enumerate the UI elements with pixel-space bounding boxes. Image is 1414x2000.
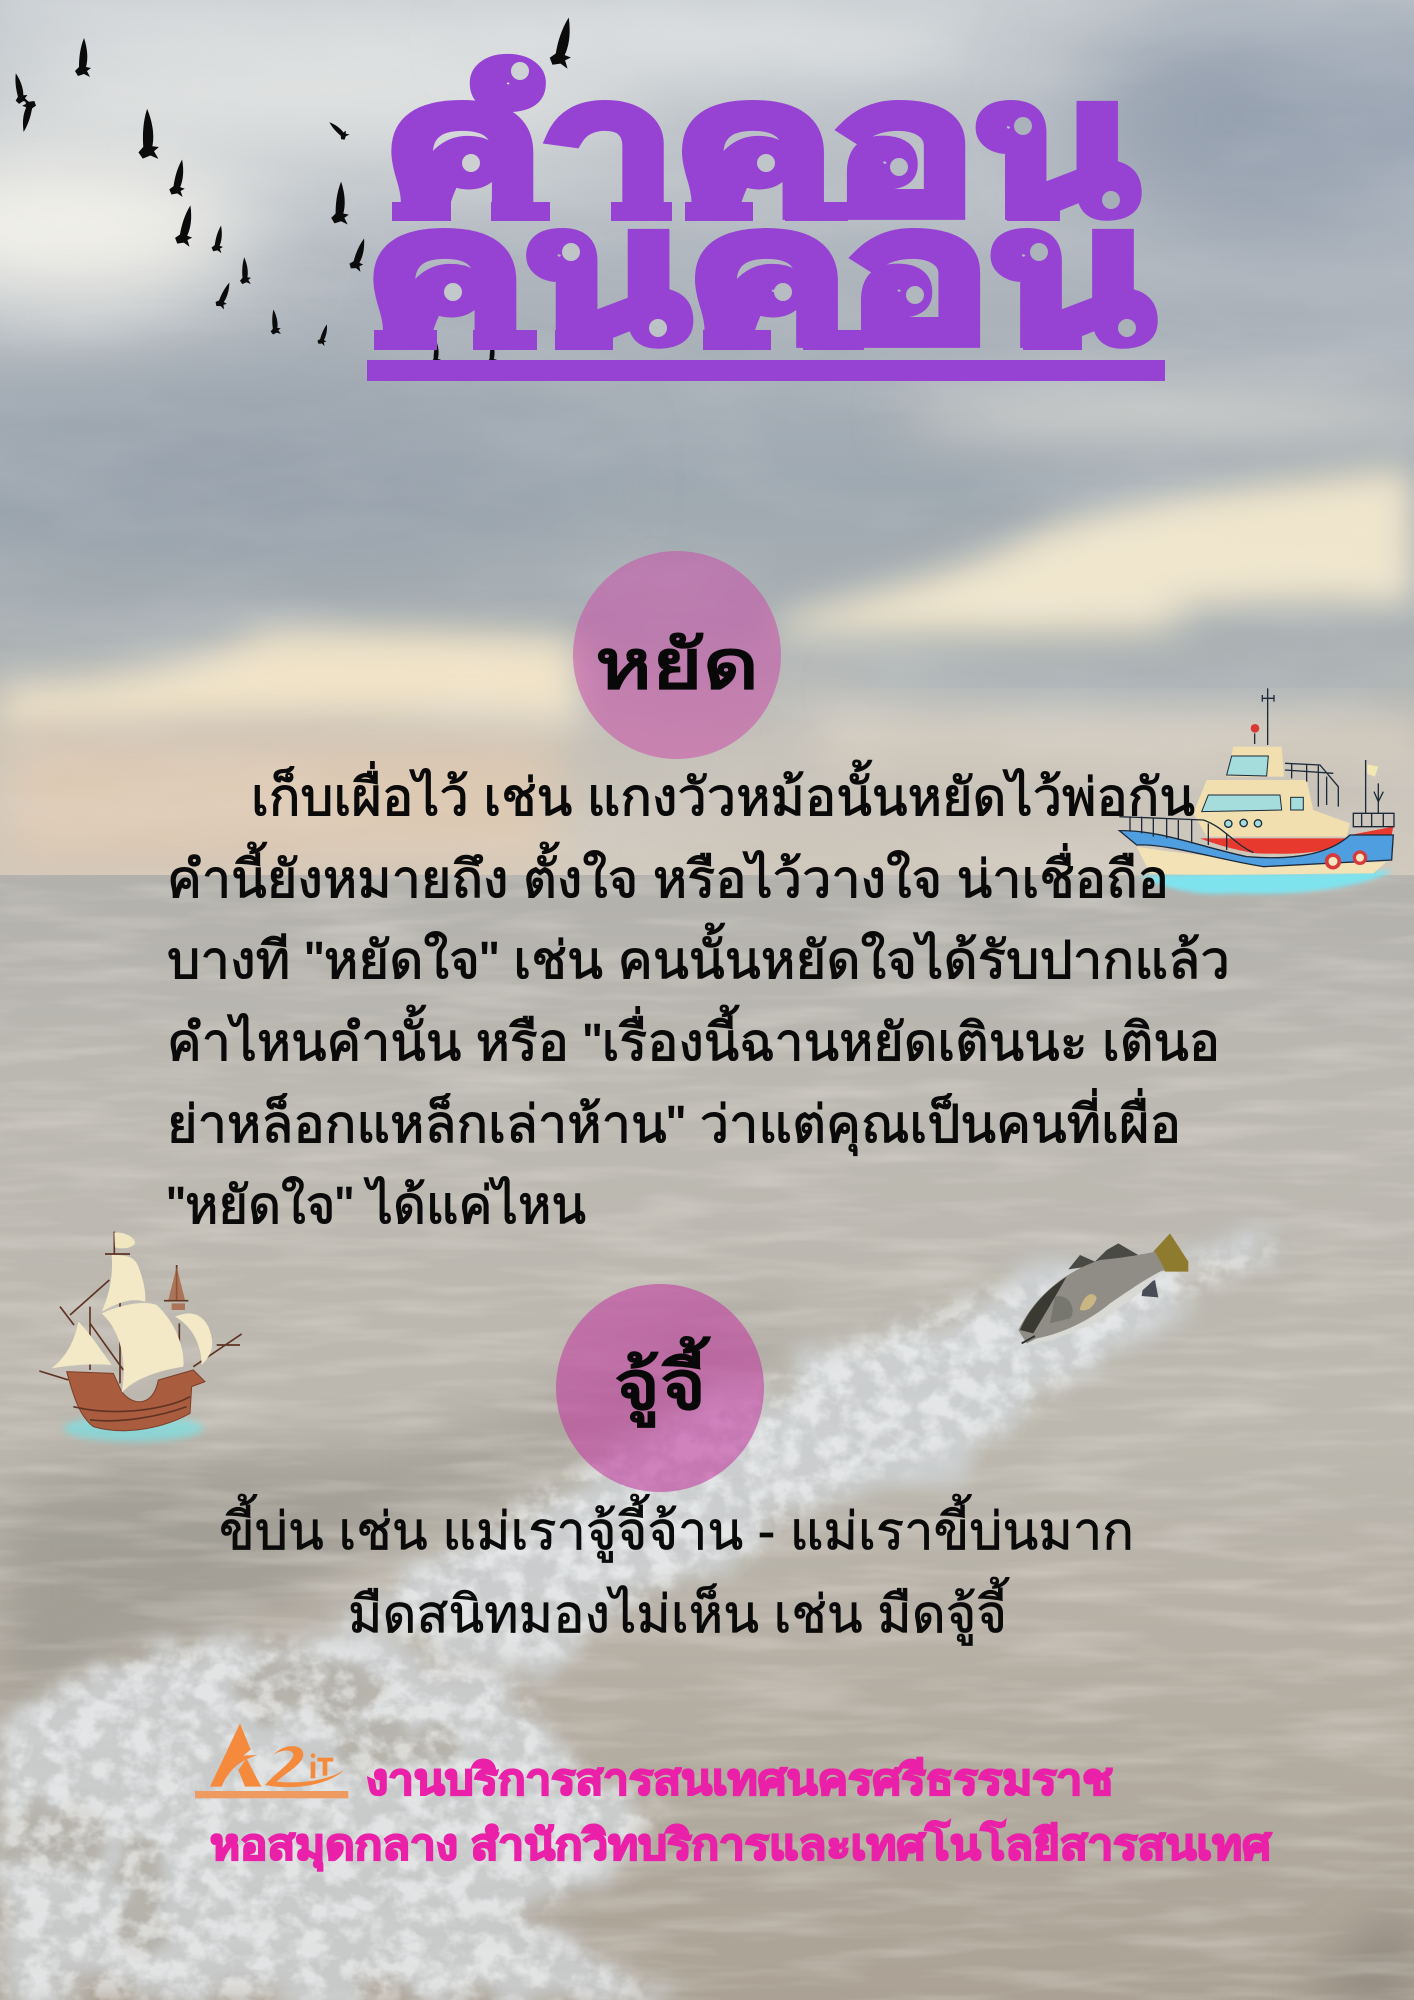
body text: หยัด: เก็บเผื่อไว้ เช่น แกงวัวหม้อนั้นหยัดไว้พ่อกัน [251,760,1195,827]
title letter counters [444,62,1136,337]
title line 2: คนคอน [366,174,1152,378]
heading circle: จู้จี้ [556,1284,764,1492]
footer text: งานบริการสารสนเทศนครศรีธรรมราช [366,1756,1113,1803]
heading circle: หยัด [573,551,781,759]
footer text: หอสมุดกลาง สำนักวิทบริการและเทศโนโลยีสารสนเทศ [210,1820,1272,1871]
title line 1: คำคอน [384,46,1136,250]
footer text [210,1756,1272,1871]
title letter feet [374,202,1082,350]
body text: หยัด: คำไหนคำนั้น หรือ "เรื่องนี้ฉานหยัดเตินนะ เตินอ [167,1005,1220,1072]
icon: barramundi fish [1018,1233,1188,1343]
icon: boat [1119,688,1394,894]
body text: หยัด: ย่าหล็อกแหล็กเล่าห้าน" ว่าแต่คุณเป็นคนที่เผื่อ [167,1088,1181,1156]
background: right cloud streak [775,466,1414,636]
heading circle: จู้จี้: จู้จี้ [614,1335,712,1429]
logo: A2IT [195,1723,348,1798]
body text: หยัด [167,760,1230,1235]
background: sky [0,0,1414,880]
body text: หยัด: บางที "หยัดใจ" เช่น คนนั้นหยัดใจได้รับปากแล้ว [167,923,1230,990]
background: sea and beach [0,875,1414,2000]
icon: galleon ship [39,1232,242,1442]
body text: จู้จี้ [219,1494,1134,1646]
body text: หยัด: คำนี้ยังหมายถึง ตั้งใจ หรือไว้วางใจ น่าเชื่อถือ [167,842,1169,909]
title [366,46,1165,381]
body text: หยัด: "หยัดใจ" ได้แค่ไหน [167,1176,586,1235]
body text: จู้จี้: ขี้บ่น เช่น แม่เราจู้จี้จ้าน - แม่เราขี้บ่นมาก [219,1494,1134,1563]
heading circle: หยัด: หยัด [595,627,759,703]
birds [9,15,578,365]
title underline [367,360,1165,381]
body text: จู้จี้: มืดสนิทมองไม่เห็น เช่น มืดจู้จี้ [348,1577,1010,1646]
